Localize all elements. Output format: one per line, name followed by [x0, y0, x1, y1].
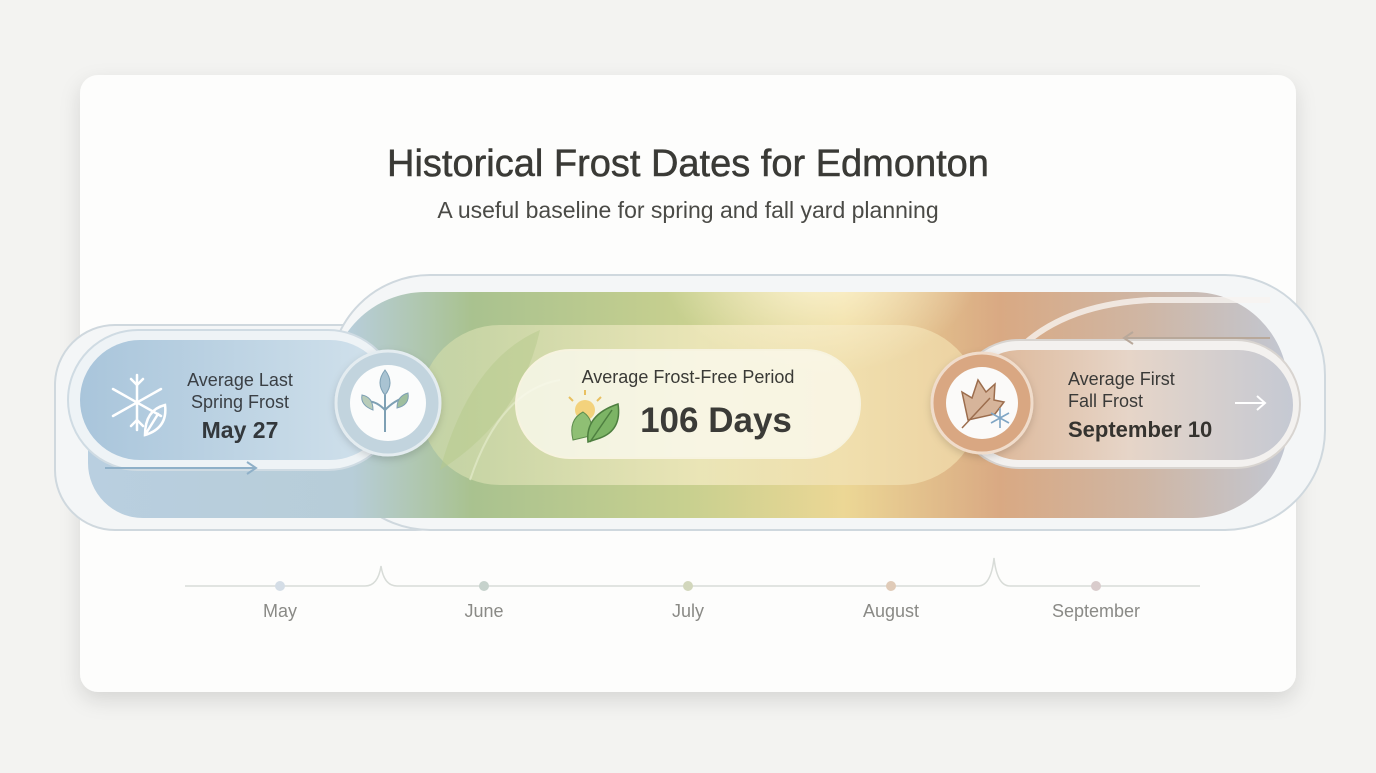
arrow left [1124, 332, 1270, 344]
center pill [516, 350, 860, 458]
frost band [54, 274, 1326, 531]
month labels: September [1052, 601, 1140, 621]
month labels: August [863, 601, 919, 621]
timeline [185, 558, 1200, 621]
left circle icon [336, 351, 440, 455]
left pill: Spring Frost [191, 392, 289, 412]
right pill: Fall Frost [1068, 391, 1143, 411]
arrow right [1235, 396, 1265, 410]
center pill: 106 Days [640, 401, 792, 440]
right circle icon [932, 353, 1032, 453]
left pill: Average Last [187, 370, 293, 390]
right pill: Average First [1068, 369, 1175, 389]
right pill: September 10 [1068, 417, 1212, 442]
month labels: June [464, 601, 504, 621]
arrow right [105, 462, 256, 474]
center pill: Average Frost-Free Period [582, 367, 794, 387]
month labels: July [672, 601, 704, 621]
left pill: May 27 [202, 417, 278, 443]
title: Historical Frost Dates for Edmonton [387, 143, 989, 185]
card [80, 75, 1296, 692]
month labels: May [263, 601, 297, 621]
icon: snowflake leaf [113, 375, 165, 435]
right pill [955, 332, 1300, 468]
subtitle: A useful baseline for spring and fall yard planning [437, 197, 939, 223]
left pill [68, 330, 398, 474]
icon: sun and leaf [569, 390, 619, 442]
month labels [263, 601, 1140, 621]
